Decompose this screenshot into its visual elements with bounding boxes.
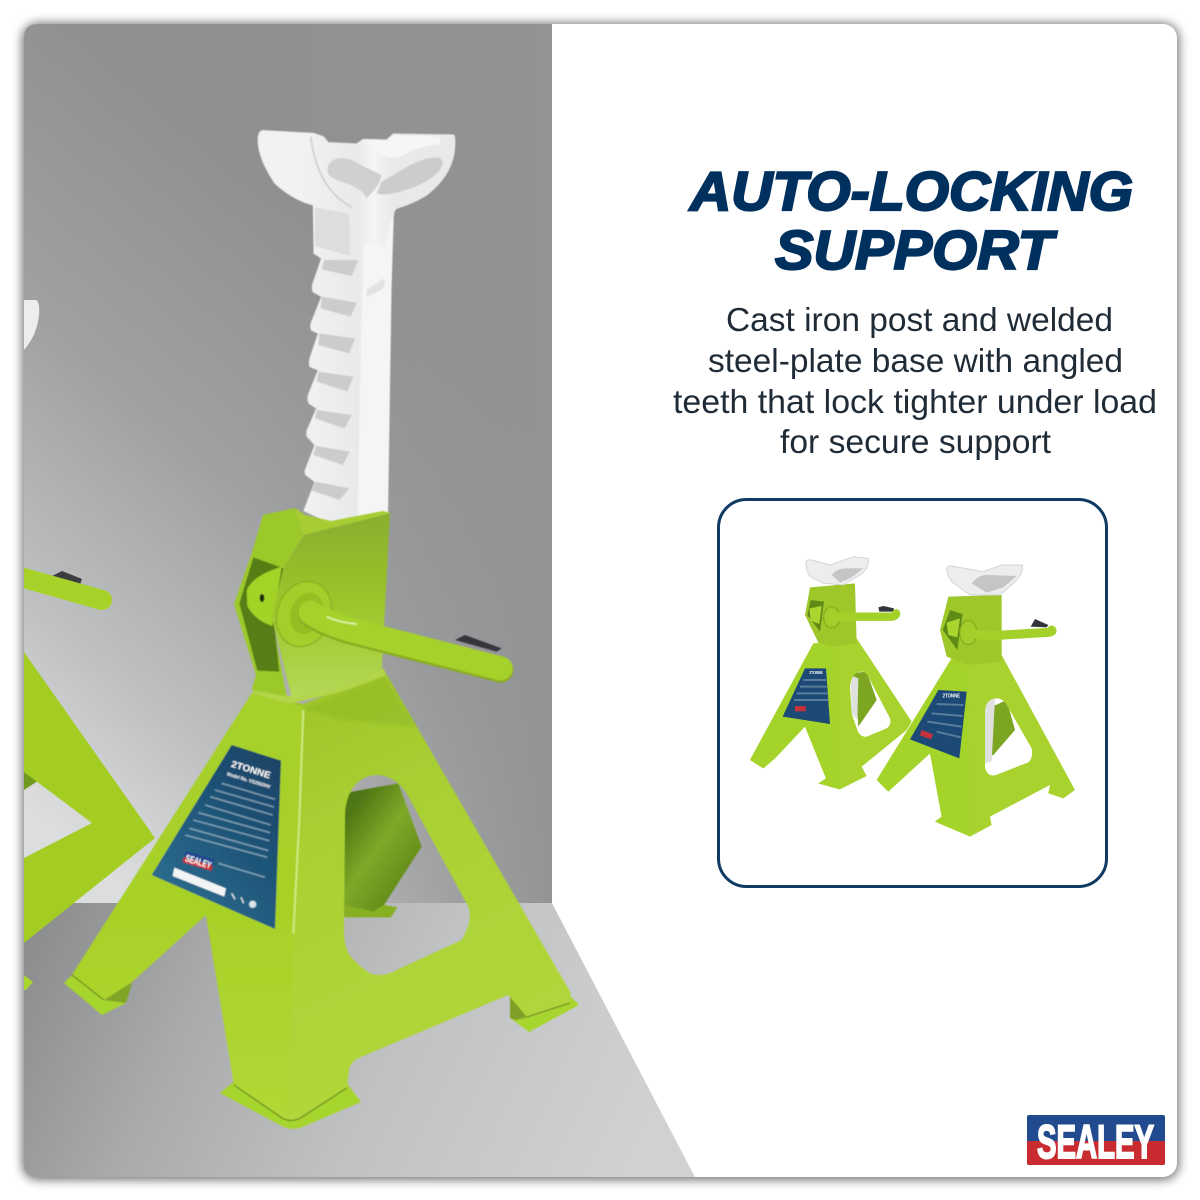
small slot <box>807 600 824 632</box>
logo red band <box>1027 1141 1165 1165</box>
small label text: 2TONNE <box>809 670 823 676</box>
handle washer <box>268 574 340 654</box>
small post seen in hole <box>851 675 858 720</box>
small saddle hollow <box>832 568 863 583</box>
cropped handle <box>24 578 102 600</box>
A-frame base with hole <box>72 672 571 1120</box>
tower inner rim <box>295 508 390 535</box>
inset frame <box>718 500 1106 886</box>
mini logo blue <box>184 851 215 866</box>
small label right <box>910 690 967 758</box>
description line 4: for secure support <box>780 423 1051 460</box>
floor background <box>24 903 695 1177</box>
small jack stand right <box>877 565 1075 837</box>
cropped saddle <box>24 300 39 350</box>
saddle hollow left <box>327 158 382 198</box>
logo: Sealey <box>1027 1115 1165 1168</box>
small jack stand left <box>750 557 912 789</box>
tower slot <box>239 557 286 672</box>
label logo <box>182 851 215 872</box>
heading line 2: SUPPORT <box>775 219 1058 281</box>
ratchet pin <box>247 567 282 626</box>
small label <box>783 668 830 724</box>
description line 2: steel-plate base with angled <box>708 342 1123 379</box>
foot edge lines <box>72 975 570 1120</box>
label plate <box>152 745 281 929</box>
small handle <box>833 613 896 617</box>
saddle top dip <box>386 136 440 157</box>
small saddle right <box>947 565 1023 595</box>
logo blue band <box>1027 1115 1165 1165</box>
left frame face <box>72 693 303 1123</box>
handle highlight <box>327 617 357 624</box>
cropped rear leg <box>24 772 37 790</box>
small rear leg <box>851 672 877 727</box>
label title: 2TONNE <box>230 759 272 780</box>
wall background <box>24 24 552 904</box>
description text <box>673 301 1157 460</box>
saddle hollow right <box>377 157 443 194</box>
small flange right <box>960 621 977 645</box>
inset box: pair of jack stands <box>718 500 1106 886</box>
block below saddle <box>315 207 350 256</box>
mini logo red <box>182 857 213 871</box>
label model: Model No. VS2002HV <box>226 772 271 791</box>
cropped rubber stop <box>52 571 82 584</box>
right foot underside <box>510 997 527 1020</box>
main jack stand <box>64 508 579 1129</box>
post fin <box>367 279 385 297</box>
small left face shade <box>750 643 839 789</box>
handle bar <box>311 613 501 668</box>
tooth shadows <box>312 260 358 500</box>
small label logo <box>795 706 806 711</box>
heading <box>688 160 1133 281</box>
small label title right: 2TONNE <box>943 693 960 699</box>
small left face right <box>877 658 969 836</box>
small label lines <box>794 680 828 700</box>
small tower right <box>940 595 1002 665</box>
cropped foot <box>24 975 33 990</box>
small slot right <box>943 610 963 650</box>
white cast iron post <box>258 131 455 528</box>
panel: product photo <box>24 24 695 1177</box>
label white box <box>173 868 226 897</box>
small flange <box>824 607 840 628</box>
heading line 1: AUTO-LOCKING <box>688 160 1133 222</box>
description line 1: Cast iron post and welded <box>726 301 1113 338</box>
post right rib <box>357 215 393 520</box>
small saddle hollow right <box>972 575 1017 593</box>
rubber stop <box>455 635 502 652</box>
under-tower shadow <box>314 680 418 726</box>
saddle seam <box>311 137 352 207</box>
small label lines right <box>927 704 963 737</box>
left foot <box>64 975 132 1015</box>
edge highlight <box>293 710 303 933</box>
small tower <box>805 583 857 647</box>
pin hole <box>260 594 264 602</box>
rear weld foot <box>345 905 397 917</box>
small pin right <box>947 618 960 637</box>
front foot <box>220 1082 361 1129</box>
tower left cheek <box>234 508 304 697</box>
small rear leg right <box>985 700 1015 757</box>
left foot rear <box>104 982 133 1004</box>
small saddle <box>806 557 869 585</box>
washer inner <box>284 588 329 639</box>
small rubber <box>878 606 894 612</box>
description line 3: teeth that lock tighter under load <box>673 383 1157 420</box>
cropped frame <box>24 652 155 943</box>
washer ring <box>268 574 340 654</box>
mini logo text: SEALEY <box>184 853 213 872</box>
post silhouette <box>258 131 455 528</box>
weld seam <box>253 672 385 700</box>
label symbol round <box>249 901 256 908</box>
tonnage label <box>152 745 281 929</box>
small pin <box>809 606 822 624</box>
small frame <box>750 638 912 789</box>
second jack stand, partly cropped <box>24 300 155 990</box>
right foot <box>510 992 579 1032</box>
small logo right <box>920 730 933 739</box>
small rubber right <box>1031 619 1048 627</box>
label instructions <box>185 783 275 877</box>
rear leg seen through hole <box>343 783 422 917</box>
tower front face <box>272 513 390 697</box>
small frame right <box>877 655 1075 837</box>
small post right <box>985 698 995 763</box>
small handle right <box>970 630 1052 636</box>
handle shade <box>311 615 501 670</box>
label symbols <box>232 893 244 903</box>
